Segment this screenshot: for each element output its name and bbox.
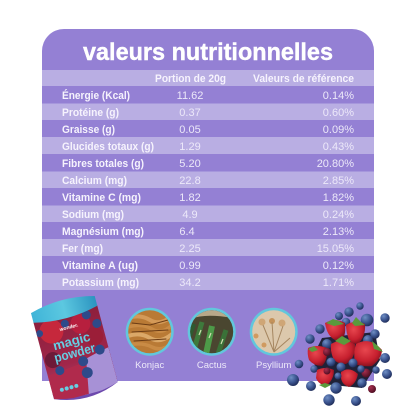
row: glucides: Glucides totaux (g)	[62, 141, 154, 153]
row: calcium: Calcium (mg)	[62, 175, 127, 187]
jar dots	[59, 383, 79, 392]
row: magnésium	[62, 226, 354, 238]
dark core behind fruit	[312, 332, 380, 388]
nutrition table	[42, 70, 374, 290]
row: sodium: 0.24%	[323, 209, 354, 221]
row: fer: Fer (mg)	[62, 243, 103, 255]
strawberry leaves	[308, 317, 383, 388]
row: calcium	[62, 175, 354, 187]
label: psyllium: Psyllium	[256, 360, 291, 371]
row: énergie: 0.14%	[323, 90, 354, 102]
row: vitamine A: 0.99	[179, 260, 201, 272]
table header	[155, 73, 354, 85]
row: sodium: 4.9	[182, 209, 198, 221]
row: protéine: 0.60%	[323, 107, 354, 119]
row: calcium: 22.8	[179, 175, 201, 187]
jar name: magic	[51, 329, 92, 353]
small blueberries in centre	[326, 358, 365, 380]
row: fibres: 5.20	[179, 158, 201, 170]
row: magnésium: 2.13%	[323, 226, 354, 238]
row: énergie: Énergie (Kcal)	[62, 89, 130, 102]
row: vitamine C	[62, 192, 354, 204]
row: graisse: 0.09%	[323, 124, 354, 136]
row: vitamine A: 0.12%	[323, 260, 354, 272]
row: fibres: 20.80%	[317, 158, 354, 170]
strawberries	[308, 320, 382, 387]
row: potassium	[62, 277, 354, 289]
ingredient: cactus	[188, 308, 236, 371]
dark cherries	[362, 368, 376, 393]
ingredient: konjac	[126, 308, 174, 371]
jar lid	[30, 292, 98, 327]
ingredient: psyllium	[250, 308, 298, 371]
row: glucides	[62, 141, 354, 153]
label: cactus: Cactus	[197, 360, 227, 371]
row: protéine	[62, 107, 354, 119]
centre red berry	[323, 348, 331, 374]
row: potassium: 1.71%	[323, 277, 354, 289]
row: calcium: 2.85%	[323, 175, 354, 187]
row: sodium: Sodium (mg)	[62, 209, 124, 221]
jar brand: wonder.	[58, 322, 80, 333]
row: énergie	[62, 89, 354, 102]
jar name second line: powder	[52, 340, 97, 365]
row: fer	[62, 243, 354, 255]
row: potassium: Potassium (mg)	[62, 277, 139, 289]
blueberries	[287, 302, 392, 406]
row: graisse	[62, 124, 354, 136]
product jar	[31, 296, 118, 400]
panel: nutrition background	[42, 29, 374, 381]
row: énergie: 11.62	[177, 90, 203, 102]
row: glucides: 1.29	[179, 141, 201, 153]
row: protéine: Protéine (g)	[62, 107, 119, 119]
row: vitamine C: 1.82	[179, 192, 201, 204]
label: konjac: Konjac	[135, 360, 164, 371]
table header: Valeurs de référence	[253, 73, 354, 85]
row: fer: 2.25	[179, 243, 201, 255]
row: vitamine C: 1.82%	[323, 192, 354, 204]
table header: Portion de 20g	[155, 73, 226, 85]
berries cluster	[287, 302, 392, 406]
row: graisse: Graisse (g)	[62, 124, 115, 136]
row: magnésium: 6.4	[179, 226, 195, 238]
row: potassium: 34.2	[179, 277, 201, 289]
row: fer: 15.05%	[317, 243, 354, 255]
row: fibres: Fibres totales (g)	[62, 158, 144, 170]
row: glucides: 0.43%	[323, 141, 354, 153]
row: vitamine A	[62, 260, 354, 272]
row: fibres	[62, 158, 354, 170]
row: vitamine A: Vitamine A (ug)	[62, 260, 138, 272]
row: sodium	[62, 209, 354, 221]
row: vitamine C: Vitamine C (mg)	[62, 192, 141, 204]
title: valeurs nutritionnelles	[83, 39, 333, 66]
row: graisse: 0.05	[179, 124, 201, 136]
row: protéine: 0.37	[179, 107, 201, 119]
row: magnésium: Magnésium (mg)	[62, 226, 144, 238]
